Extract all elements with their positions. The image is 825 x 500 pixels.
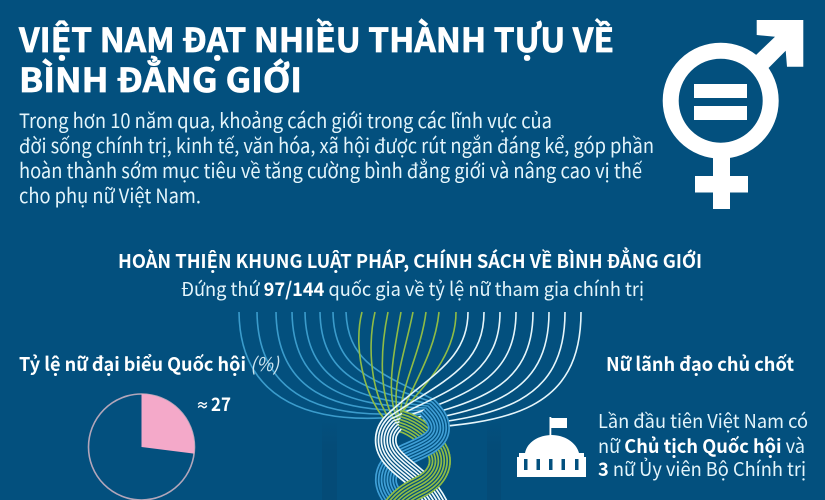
section heading: HOÀN THIỆN KHUNG LUẬT PHÁP, CHÍNH SÁCH VỀ BÌNH ĐẲNG GIỚI: [118, 247, 702, 274]
left panel heading: Tỷ lệ nữ đại biểu Quốc hội (%): [19, 350, 281, 377]
right panel text: [598, 407, 808, 482]
intro text block: cho phụ nữ Việt Nam.: [19, 180, 201, 209]
white braid band: [386, 422, 440, 500]
green braid band, lower crossing: [390, 452, 440, 500]
right panel text: nữ Chủ tịch Quốc hội và: [598, 432, 805, 459]
title: BÌNH ĐẲNG GIỚI: [19, 54, 302, 102]
title: VIỆT NAM ĐẠT NHIỀU THÀNH TỰU VỀ: [18, 14, 614, 62]
pie value label: ≈: [196, 395, 209, 414]
green fan lines: [359, 312, 456, 431]
decorative strands: blue, green and white fan into a braid: [239, 312, 581, 500]
intro text block: hoàn thành sớm mục tiêu về tăng cường bình đẳng giới và nâng cao vị thế: [19, 155, 643, 184]
pie chart: female deputies: [88, 394, 194, 500]
title: [18, 14, 614, 102]
intro text block: Trong hơn 10 năm qua, khoảng cách giới trong các lĩnh vực của: [19, 105, 552, 134]
right panel heading: Nữ lãnh đạo chủ chốt: [606, 350, 794, 377]
icon: parliament building: [517, 417, 586, 477]
pie value label: [196, 391, 231, 417]
blue braid band: [386, 407, 439, 500]
pie value label: 27: [211, 391, 231, 417]
green braid band: [390, 421, 440, 500]
right panel text: Lần đầu tiên Việt Nam có: [598, 407, 808, 434]
intro text block: [19, 105, 654, 209]
white fan lines: [387, 312, 581, 429]
blue fan lines: [239, 312, 434, 418]
section subheading: Đứng thứ 97/144 quốc gia về tỷ lệ nữ tham gia chính trị: [181, 275, 644, 302]
right panel text: 3 nữ Ủy viên Bộ Chính trị: [598, 455, 806, 482]
icon: gender equality symbol: [671, 20, 803, 209]
intro text block: đời sống chính trị, kinh tế, văn hóa, xã hội được rút ngắn đáng kể, góp phần: [19, 130, 654, 159]
